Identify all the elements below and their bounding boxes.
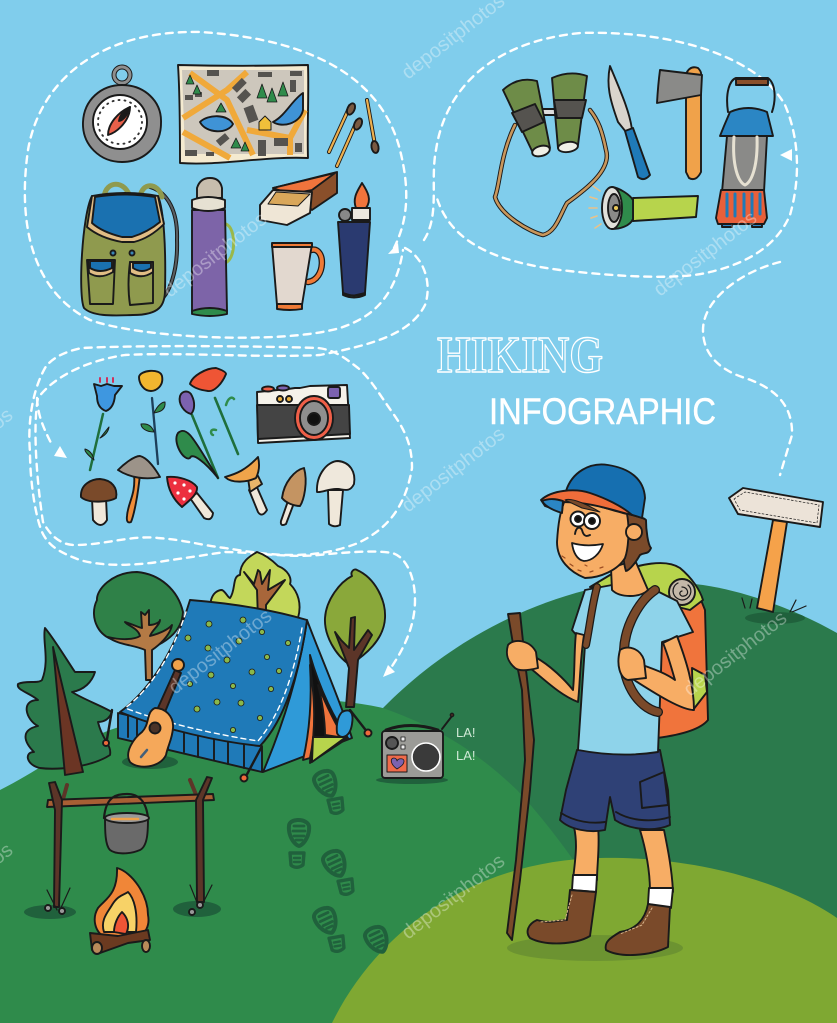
icon: compass bbox=[83, 67, 161, 162]
icon: mushrooms bbox=[81, 456, 354, 526]
icon: radio bbox=[376, 714, 453, 784]
watermark: depositphotos bbox=[680, 607, 791, 701]
rolled mat bbox=[590, 563, 703, 610]
icon: camera bbox=[257, 385, 350, 443]
hill: light green front bbox=[332, 858, 837, 1023]
tent valance bbox=[118, 713, 262, 772]
watermark: depositphotos bbox=[398, 423, 509, 517]
hair bbox=[622, 512, 651, 571]
icon: lighter bbox=[338, 183, 370, 298]
hiker bbox=[507, 464, 708, 961]
icon: binoculars bbox=[495, 73, 607, 235]
face bbox=[557, 498, 628, 578]
title: INFOGRAPHIC: INFOGRAPHIC bbox=[489, 391, 716, 432]
icon: map bbox=[178, 65, 308, 164]
icon: thermos bbox=[192, 178, 234, 316]
tent front bbox=[120, 600, 307, 746]
ground shadow bbox=[507, 935, 683, 961]
watermark: depositphotos bbox=[160, 208, 271, 302]
text: la la bbox=[456, 725, 476, 763]
shorts bbox=[560, 750, 670, 831]
hill: mid green left bbox=[0, 699, 600, 1023]
cap bbox=[566, 464, 645, 518]
arrowheads bbox=[54, 149, 792, 677]
title: HIKING: HIKING bbox=[437, 327, 603, 384]
pot and rack bbox=[45, 777, 214, 915]
tent opening bbox=[303, 655, 348, 763]
tree: leaf bbox=[325, 569, 385, 707]
tent ropes and pegs bbox=[103, 710, 372, 782]
torso and shirt bbox=[572, 585, 693, 755]
shoulder straps bbox=[586, 587, 597, 645]
boots bbox=[528, 890, 596, 943]
dashed trail bbox=[25, 32, 797, 672]
watermark: depositphotos bbox=[650, 207, 761, 301]
socks bbox=[572, 875, 673, 908]
icon: backpack bbox=[81, 184, 177, 315]
icon: matches bbox=[329, 100, 379, 166]
smile bbox=[572, 543, 603, 561]
tent side bbox=[263, 620, 352, 772]
text: la la: LA! bbox=[456, 748, 476, 763]
icon: guitar bbox=[122, 659, 184, 769]
campsite ground shadows bbox=[24, 901, 221, 919]
right hand bbox=[618, 648, 646, 680]
text: la la: LA! bbox=[456, 725, 476, 740]
icon: axe bbox=[657, 67, 702, 179]
neck bbox=[611, 560, 648, 596]
footprints bbox=[289, 768, 392, 956]
icon: flower red bbox=[190, 368, 238, 454]
watermark: depositphotos bbox=[165, 605, 276, 699]
campfire bbox=[90, 868, 150, 954]
backpack body bbox=[640, 570, 708, 738]
icon: lantern bbox=[716, 78, 775, 227]
icon: mug bbox=[272, 243, 322, 310]
tree: pine bbox=[18, 628, 112, 775]
legs bbox=[573, 827, 673, 892]
icon: flower blue bbox=[85, 378, 122, 470]
icon: knife bbox=[608, 66, 650, 179]
tree: yellow bbox=[210, 552, 300, 620]
watermark: depositphotos bbox=[398, 850, 509, 944]
tree: round bbox=[94, 572, 183, 680]
icon: flashlight bbox=[602, 187, 698, 229]
walking stick bbox=[507, 613, 534, 940]
signpost bbox=[729, 488, 823, 624]
hill: dark green right bbox=[383, 582, 837, 1023]
icon: flashlight rays bbox=[589, 186, 601, 228]
icon: flower purple bbox=[176, 392, 218, 478]
left hand bbox=[507, 641, 538, 670]
eyes bbox=[570, 512, 586, 526]
icon: flower yellow bbox=[139, 371, 165, 464]
arms bbox=[530, 633, 584, 702]
icon: matchbox bbox=[260, 172, 337, 225]
